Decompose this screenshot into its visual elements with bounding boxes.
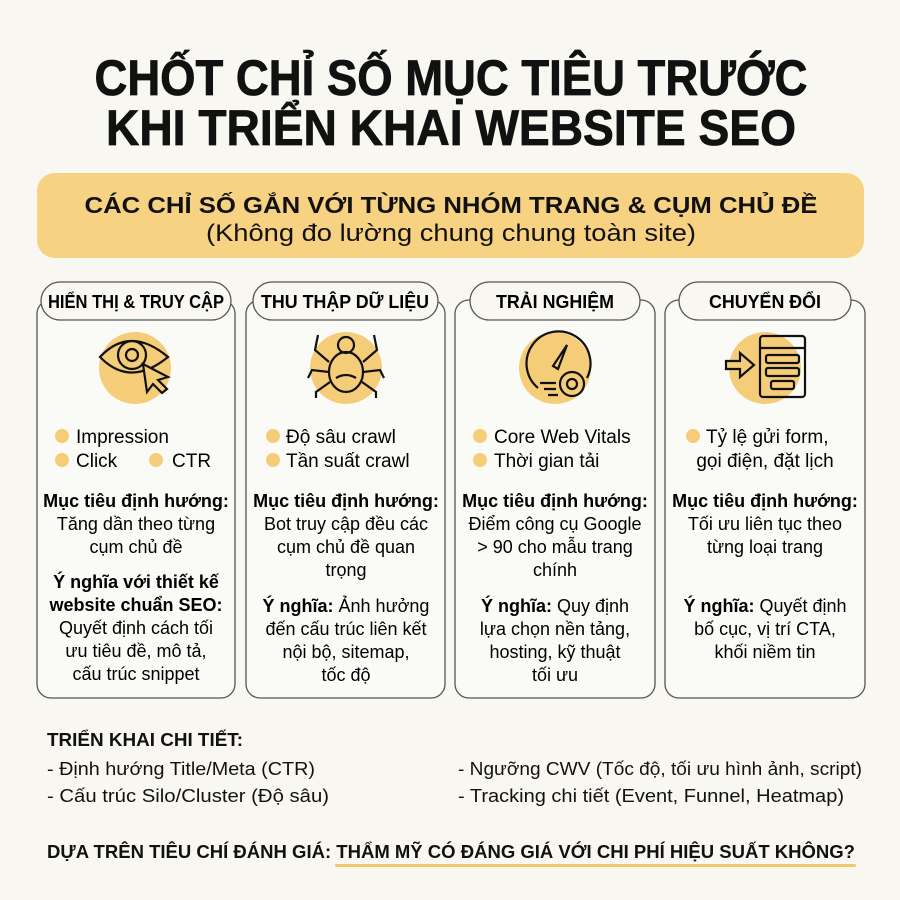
text: muc tieu: > 90 cho mẫu trang bbox=[477, 536, 633, 557]
bullets bbox=[266, 427, 410, 472]
text: y nghia bbox=[480, 595, 630, 685]
text: muc tieu: Điểm công cụ Google bbox=[468, 514, 642, 534]
bullets bbox=[55, 427, 211, 472]
text: muc tieu bbox=[43, 491, 229, 557]
text: muc tieu: trọng bbox=[325, 560, 367, 580]
text: muc tieu: Bot truy cập đều các bbox=[264, 514, 428, 534]
text: muc tieu bbox=[462, 491, 648, 580]
icon: spider bbox=[308, 332, 384, 404]
text: muc tieu: cụm chủ đề bbox=[89, 537, 183, 557]
text: muc tieu: Mục tiêu định hướng: bbox=[672, 491, 858, 511]
text: y nghia: Quyết định cách tối bbox=[59, 618, 213, 638]
panel: chuyen doi bbox=[665, 282, 865, 698]
tab: chuyen doi: CHUYỂN ĐỔI bbox=[709, 291, 821, 312]
footer question: DỰA TRÊN TIÊU CHÍ ĐÁNH GIÁ: THẨM MỸ CÓ ĐÁNG GIÁ VỚI CHI PHÍ HIỆU SUẤT KHÔNG? bbox=[47, 841, 855, 862]
text: y nghia bbox=[263, 595, 429, 685]
bullets: Độ sâu crawl bbox=[286, 427, 396, 448]
icon: gauge gear bbox=[519, 331, 591, 404]
bullets: Impression bbox=[76, 427, 169, 448]
text: muc tieu: Mục tiêu định hướng: bbox=[43, 491, 229, 511]
tab: hien thi: HIỂN THỊ & TRUY CẬP bbox=[48, 291, 224, 312]
text: y nghia: cấu trúc snippet bbox=[72, 664, 200, 684]
banner bbox=[37, 173, 864, 258]
tab: thu thap bbox=[253, 282, 438, 320]
bullets: CTR bbox=[172, 451, 211, 472]
panel: thu thap bbox=[246, 282, 445, 698]
text: muc tieu: Mục tiêu định hướng: bbox=[253, 491, 439, 511]
text: y nghia: tối ưu bbox=[532, 665, 578, 685]
tab: chuyen doi bbox=[679, 282, 851, 320]
tab: thu thap: THU THẬP DỮ LIỆU bbox=[261, 291, 429, 312]
tab: trai nghiem bbox=[470, 282, 640, 320]
section: trien khai chi tiet: - Định hướng Title/Meta (CTR) bbox=[47, 759, 315, 779]
title: CHỐT CHỈ SỐ MỤC TIÊU TRƯỚC bbox=[94, 49, 808, 106]
section: trien khai chi tiet: - Ngưỡng CWV (Tốc độ, tối ưu hình ảnh, script) bbox=[458, 759, 862, 779]
text: y nghia bbox=[683, 595, 847, 662]
bullets: gọi điện, đặt lịch bbox=[696, 451, 834, 472]
text: muc tieu: Mục tiêu định hướng: bbox=[462, 491, 648, 511]
icon: eye click bbox=[99, 332, 171, 404]
text: muc tieu: chính bbox=[533, 560, 577, 580]
icon: form arrow bbox=[726, 332, 805, 404]
section: trien khai chi tiet: - Tracking chi tiết (Event, Funnel, Heatmap) bbox=[458, 786, 844, 806]
bullets: Click bbox=[76, 451, 118, 472]
text: y nghia: ưu tiêu đề, mô tả, bbox=[65, 641, 207, 661]
text: muc tieu bbox=[672, 491, 858, 557]
tab: trai nghiem: TRẢI NGHIỆM bbox=[496, 291, 614, 312]
text: y nghia: tốc độ bbox=[321, 665, 371, 685]
bullets bbox=[686, 427, 834, 472]
text: y nghia: hosting, kỹ thuật bbox=[489, 642, 621, 662]
text: y nghia: Ý nghĩa với thiết kế bbox=[53, 571, 220, 592]
text: y nghia: bố cục, vị trí CTA, bbox=[694, 619, 836, 639]
text: y nghia: nội bộ, sitemap, bbox=[282, 642, 410, 662]
bullets: Thời gian tải bbox=[494, 451, 599, 472]
text: y nghia: khối niềm tin bbox=[714, 642, 816, 662]
text: muc tieu bbox=[253, 491, 439, 580]
text: y nghia: Ý nghĩa: Quy định bbox=[481, 595, 629, 616]
bullets bbox=[473, 427, 631, 472]
panel: hien thi bbox=[37, 282, 235, 698]
section: trien khai chi tiet: - Cấu trúc Silo/Cluster (Độ sâu) bbox=[47, 786, 329, 806]
text: y nghia: đến cấu trúc liên kết bbox=[265, 619, 427, 639]
text: y nghia: Ý nghĩa: Quyết định bbox=[683, 595, 847, 616]
text: y nghia bbox=[48, 571, 223, 684]
text: muc tieu: cụm chủ đề quan bbox=[277, 537, 415, 557]
text: muc tieu: Tối ưu liên tục theo bbox=[688, 514, 842, 534]
panel: trai nghiem bbox=[455, 282, 655, 698]
section: trien khai chi tiet bbox=[47, 729, 862, 806]
banner: (Không đo lường chung chung toàn site) bbox=[206, 220, 696, 247]
title: KHI TRIỂN KHAI WEBSITE SEO bbox=[106, 100, 796, 156]
text: y nghia: website chuẩn SEO: bbox=[48, 595, 223, 615]
title bbox=[94, 49, 808, 156]
text: muc tieu: Tăng dần theo từng bbox=[57, 514, 215, 534]
text: y nghia: lựa chọn nền tảng, bbox=[480, 619, 630, 639]
bullets: Tần suất crawl bbox=[286, 451, 410, 472]
bullets: Tỷ lệ gửi form, bbox=[706, 427, 829, 448]
banner: CÁC CHỈ SỐ GẮN VỚI TỪNG NHÓM TRANG & CỤM CHỦ ĐỀ bbox=[84, 190, 818, 218]
tab: hien thi bbox=[41, 282, 231, 320]
section: trien khai chi tiet: TRIỂN KHAI CHI TIẾT: bbox=[47, 729, 243, 750]
text: y nghia: Ý nghĩa: Ảnh hưởng bbox=[263, 595, 429, 616]
text: muc tieu: từng loại trang bbox=[707, 537, 823, 557]
bullets: Core Web Vitals bbox=[494, 427, 631, 448]
